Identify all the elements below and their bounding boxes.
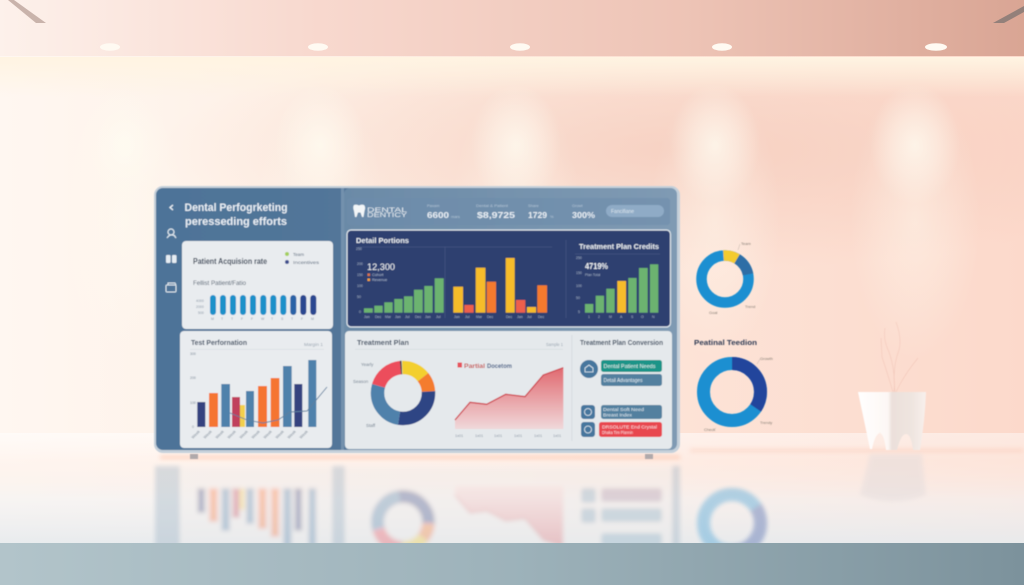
legend: Incentives	[293, 260, 320, 265]
legend: Team	[293, 252, 304, 257]
reflection of tooth planter	[860, 454, 926, 502]
yellow and orange bar chart	[453, 258, 547, 313]
donut labels: Check	[704, 427, 715, 432]
axis labels: 200	[357, 262, 363, 266]
bar chart: 4000	[196, 299, 204, 303]
bar labels: N	[652, 315, 655, 319]
note: Margin 1	[304, 342, 324, 347]
bar labels: Jul	[405, 315, 410, 319]
bar chart: 500	[198, 311, 204, 315]
conversion row 3: Dental Soft Need	[603, 407, 645, 412]
area chart labels: 1x01	[475, 434, 483, 438]
treatment heading: Treatment Plan Credits	[579, 242, 659, 251]
search pill: Fancifiane	[611, 209, 634, 215]
axis labels: 50	[357, 295, 361, 299]
conversion row 3: Breast Index	[603, 412, 633, 418]
area chart legend	[458, 362, 512, 370]
bar chart: T	[291, 317, 294, 321]
area chart labels: 1x01	[455, 434, 463, 438]
dashboard monitor	[154, 186, 680, 453]
legend: Cohort	[372, 273, 384, 277]
bar labels: O	[641, 315, 644, 319]
donut chart	[378, 368, 428, 418]
icon: search	[167, 229, 176, 238]
metric: revenue	[476, 203, 515, 220]
tooth planter with plant	[858, 322, 926, 450]
axis labels: 150	[576, 271, 582, 275]
bar labels: Jul	[436, 315, 441, 319]
axis labels: 300	[190, 352, 196, 356]
bar labels: Jan	[425, 315, 431, 319]
note: Sample 1	[546, 342, 563, 347]
conversion row 3	[581, 405, 662, 419]
bar labels: Jul	[465, 315, 470, 319]
bar labels	[364, 315, 655, 319]
bar labels: Mar	[476, 315, 483, 319]
area chart labels: 1x01	[514, 434, 522, 438]
metric: visits: 1729	[528, 210, 547, 220]
heading: Treatment Plan	[357, 338, 409, 347]
bar labels: Dec	[506, 315, 512, 319]
panel: patient acquisition	[182, 241, 333, 329]
icon: tooth	[353, 205, 365, 217]
bar chart: T	[231, 317, 234, 321]
bar chart	[197, 360, 316, 427]
area chart labels: 1x01	[534, 434, 542, 438]
planter	[858, 392, 926, 450]
monitor frame	[154, 186, 680, 453]
metric: patients	[427, 203, 460, 220]
bar labels: Dec	[487, 315, 493, 319]
icon: box	[166, 283, 176, 292]
area chart labels: 1x01	[553, 434, 561, 438]
axis labels: 100	[357, 284, 363, 288]
conversion row 2: Detail Advantages	[604, 378, 643, 384]
metric: growth: 300%	[572, 210, 595, 220]
metric: patients: mars	[451, 214, 460, 219]
conversion row 1: Dental Patient Needs	[604, 364, 656, 370]
header bar	[347, 198, 670, 225]
metric: visits: %	[550, 214, 554, 219]
heading: Test Perfornation	[191, 338, 247, 347]
metric: growth	[572, 203, 595, 220]
axis labels: 0	[192, 425, 194, 429]
metric: patients: 6600	[427, 210, 449, 220]
rotated labels: Week	[214, 429, 225, 440]
bar chart: S	[281, 317, 284, 321]
heading: side donut 2: Peatinal Teedion	[694, 338, 757, 347]
bar labels: 1	[588, 315, 590, 319]
rotated labels: Week	[190, 429, 201, 440]
bottom band	[0, 543, 1024, 585]
bar chart: F	[241, 317, 243, 321]
background: wall	[0, 0, 1024, 440]
rotated labels	[190, 429, 309, 440]
ceiling with recessed lights	[0, 0, 1024, 56]
donut labels: Trendy	[760, 420, 772, 425]
logo text: DENTICY	[367, 212, 408, 219]
logo text: DENTAL	[367, 207, 408, 214]
heading: Patient Acquision rate	[193, 257, 267, 266]
side donut 2	[704, 356, 773, 432]
conversion row 1	[580, 360, 662, 378]
panel: dental portions: Plan Total	[585, 273, 601, 277]
metric: patients: Paxam	[427, 203, 440, 208]
donut labels	[704, 356, 773, 432]
donut labels	[709, 241, 755, 315]
conversion row 4: DRSOLUTE End Crystal	[602, 424, 657, 430]
axis labels: 200	[190, 376, 196, 380]
donut labels: Team	[741, 241, 751, 246]
donut labels: Staff	[366, 423, 376, 428]
bar chart: 2000	[196, 305, 204, 309]
conversion row 4	[581, 422, 662, 437]
bar chart: W	[261, 317, 265, 321]
area chart legend: Docetom	[487, 363, 512, 370]
bar labels: Jan	[395, 315, 401, 319]
bar chart: T	[271, 317, 274, 321]
legend: Revenue	[372, 278, 387, 282]
metric: visits: Share	[528, 203, 539, 208]
area chart labels: 1x01	[494, 434, 502, 438]
bar labels: Dec	[415, 315, 421, 319]
heading: Detail Portions	[356, 236, 409, 245]
axis labels	[190, 352, 196, 429]
subheading: Fellist Patient/Fatio	[193, 280, 246, 287]
metric: revenue: $8,9725	[477, 210, 515, 220]
axis labels: 100	[190, 401, 196, 405]
rotated labels: Week	[226, 429, 237, 440]
bar labels: A	[620, 315, 623, 319]
search pill	[606, 205, 664, 217]
plant stems	[881, 322, 918, 392]
panel: dental portions	[347, 230, 670, 327]
bar labels: Jan	[454, 315, 460, 319]
rotated labels: Week	[202, 429, 213, 440]
bar chart: F	[301, 317, 303, 321]
table surface	[0, 433, 1024, 543]
icon: back chevron	[170, 205, 173, 210]
bar labels: Dec	[375, 315, 381, 319]
treatment bar chart	[585, 264, 658, 313]
bar labels: Mar	[385, 315, 392, 319]
donut labels: Trend	[745, 304, 755, 309]
rotated labels: Week	[298, 429, 309, 440]
bar labels: Jan	[364, 315, 370, 319]
bar labels: Jan	[517, 315, 523, 319]
area chart legend: Partial	[464, 363, 485, 370]
bar chart: F	[251, 317, 253, 321]
axis labels: 150	[357, 273, 363, 277]
donut labels: Yearly	[361, 362, 374, 367]
icon: book	[166, 255, 176, 263]
panel: test performance	[180, 331, 332, 448]
axis labels: 250	[356, 247, 362, 251]
axis labels: 0	[359, 310, 361, 314]
legend	[285, 252, 320, 265]
bar labels: Dec	[538, 315, 544, 319]
bar labels: 2	[598, 315, 600, 319]
axis labels: 5	[578, 310, 580, 314]
donut labels: Growth	[760, 356, 773, 361]
donut labels: Season	[353, 379, 369, 384]
legend	[368, 273, 387, 282]
rotated labels: Week	[274, 429, 285, 440]
area chart labels	[455, 434, 561, 438]
value: 12,300	[367, 262, 395, 273]
trend line	[230, 387, 327, 423]
rotated labels: Week	[238, 429, 249, 440]
conversion heading: Treatment Plan Conversion	[580, 338, 663, 347]
bar labels: S	[631, 315, 634, 319]
dashboard title: Dental Perfogrketing	[184, 202, 288, 214]
bar chart: T	[221, 317, 224, 321]
axis labels: 50	[576, 296, 580, 300]
axis labels	[356, 247, 582, 314]
donut labels: Goal	[709, 310, 718, 315]
bar chart: M	[311, 317, 314, 321]
metric: visits	[528, 203, 554, 220]
metric: revenue: Dental & Patient	[476, 203, 509, 208]
conversion row 4: Dhaka Tim Plannin	[602, 430, 634, 435]
dashboard stand feet	[190, 454, 653, 459]
logo text	[367, 207, 408, 219]
donut labels	[353, 362, 376, 428]
rotated labels: Week	[286, 429, 297, 440]
bar labels: Jul	[527, 315, 532, 319]
green bar chart	[364, 278, 444, 313]
bar chart: M	[211, 317, 214, 321]
rotated labels: Week	[262, 429, 273, 440]
metric: growth: Growt	[572, 203, 584, 208]
axis labels: 100	[576, 284, 582, 288]
dashboard subtitle: peresseding efforts	[185, 216, 287, 228]
axis labels: 250	[576, 256, 582, 260]
area chart	[455, 368, 563, 429]
reflection of dashboard on table	[154, 464, 770, 543]
treatment value: 4719%	[585, 262, 608, 271]
side donut 1	[701, 241, 755, 315]
conversion row 2	[601, 374, 662, 386]
bar labels: M	[609, 315, 612, 319]
bar chart	[196, 295, 316, 321]
rotated labels: Week	[250, 429, 261, 440]
panel: treatment plan	[345, 331, 672, 449]
